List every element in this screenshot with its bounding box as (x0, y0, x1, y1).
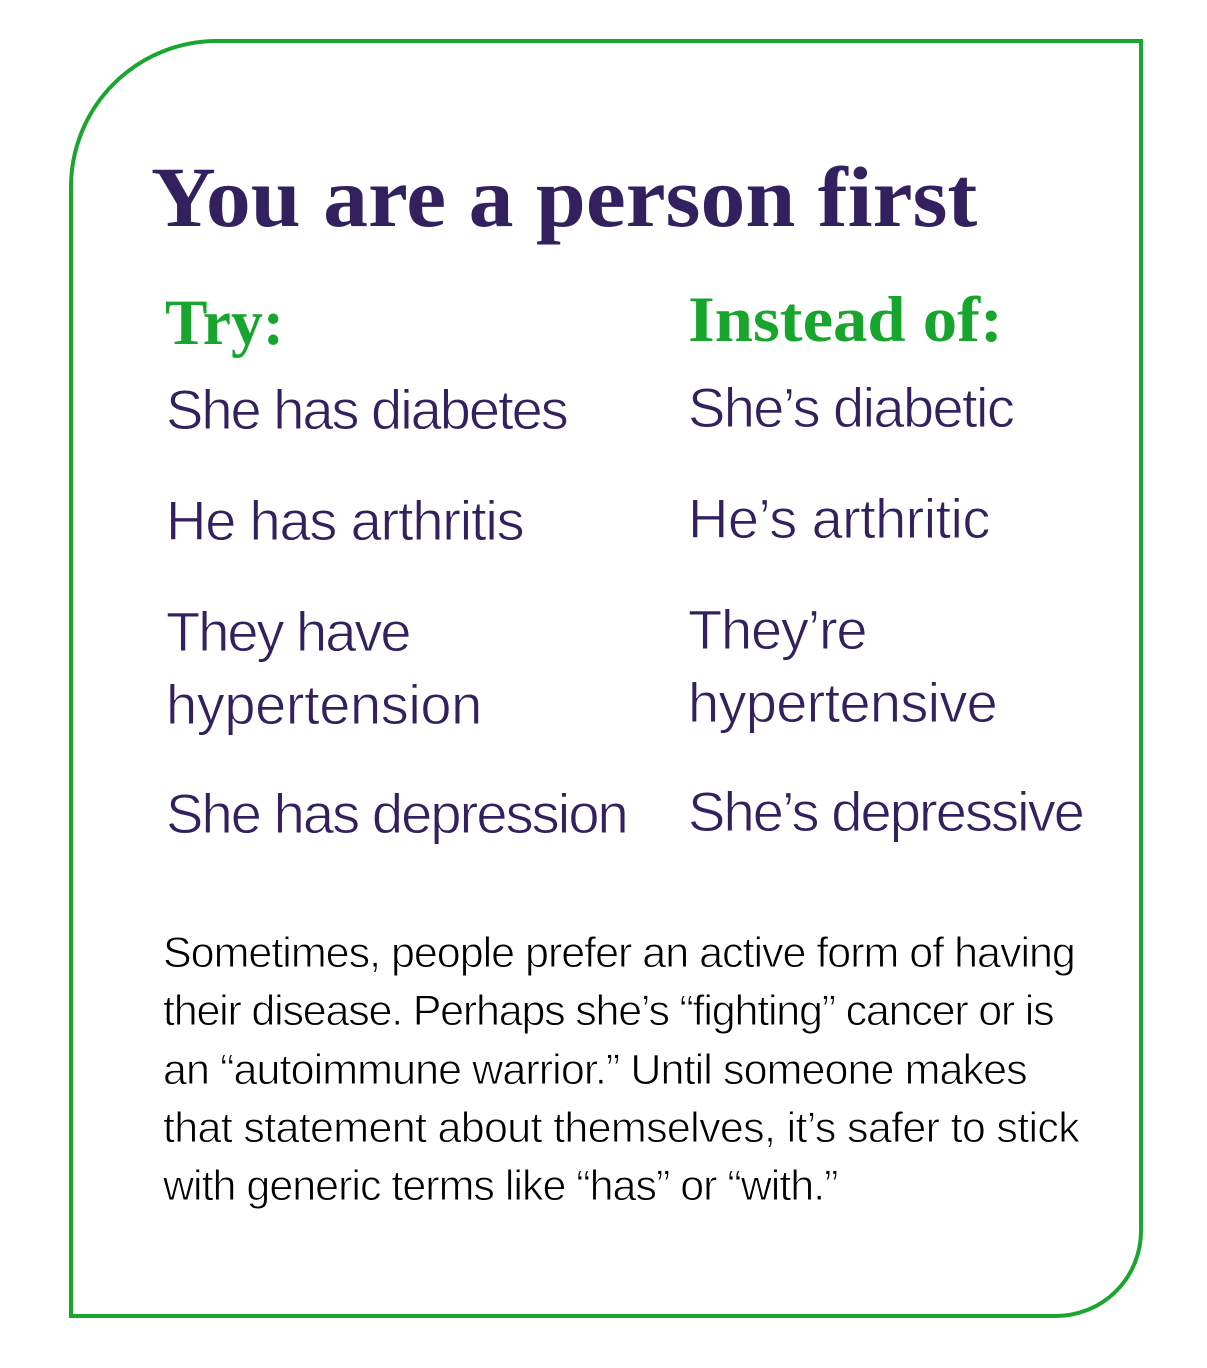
phrase: She's diabetic: She’s diabetic (688, 376, 1013, 439)
column: try phrases (166, 378, 627, 845)
text block: explanatory note: that statement about themselves, it’s safer to stick (163, 1104, 1079, 1152)
phrase: They have hypertension: hypertension (166, 672, 482, 736)
phrase: She has diabetes: She has diabetes (166, 378, 567, 441)
text block: explanatory note: with generic terms like “has” or “with.” (163, 1162, 837, 1210)
phrase: They're hypertensive: They’re (688, 598, 866, 661)
heading: Try: Try: (165, 287, 284, 359)
text block: explanatory note: their disease. Perhaps she’s “fighting” cancer or is (163, 987, 1053, 1035)
text block: explanatory note: Sometimes, people prefer an active form of having (163, 929, 1075, 977)
phrase: They're hypertensive (688, 598, 997, 734)
phrase: She has depression: She has depression (166, 782, 627, 845)
phrase: She's depressive: She’s depressive (688, 780, 1083, 843)
phrase: They're hypertensive: hypertensive (688, 670, 997, 734)
text block: explanatory note (163, 929, 1079, 1210)
phrase: They have hypertension (166, 600, 482, 736)
phrase: He's arthritic: He’s arthritic (688, 487, 990, 550)
heading: Instead of: Instead of: (688, 284, 1003, 356)
phrase: He has arthritis: He has arthritis (166, 489, 523, 552)
title: You are a person first (151, 149, 977, 245)
text block: explanatory note: an “autoimmune warrior.” Until someone makes (163, 1046, 1027, 1094)
phrase: They have hypertension: They have (166, 600, 410, 663)
column: instead-of phrases (688, 376, 1083, 843)
